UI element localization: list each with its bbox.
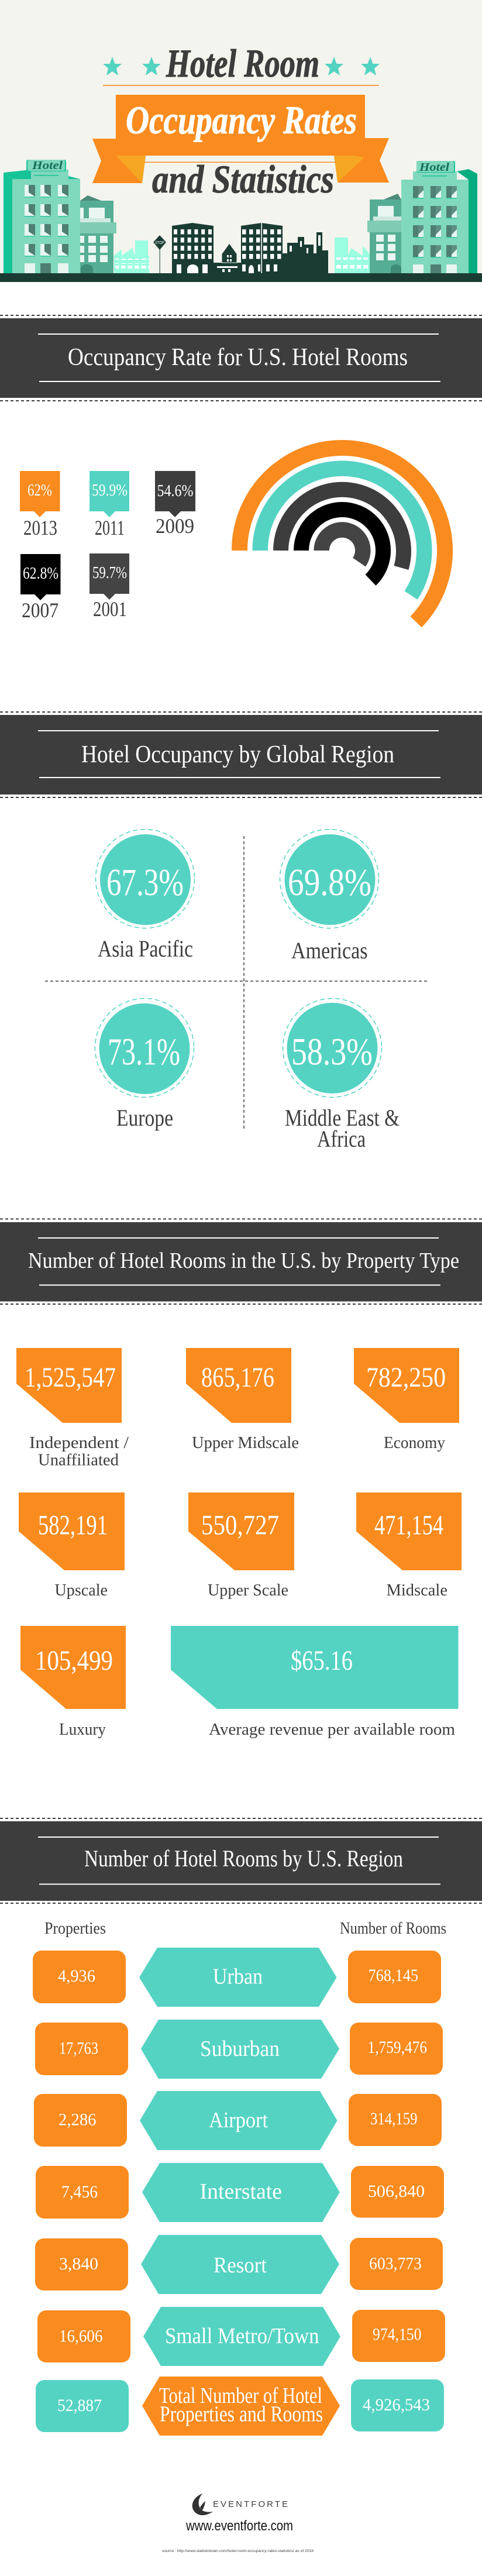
tag: 2011: 59.9%: [92, 482, 128, 500]
illustration: right factory: [335, 238, 370, 273]
tag: 2013: 2013: [23, 516, 57, 539]
row: Total: 52,887: [57, 2396, 102, 2415]
illustration: right hotel: Hotel: [419, 161, 449, 174]
illustration: left hotel: Hotel: [32, 159, 63, 172]
row: Interstate: 7,456: [61, 2182, 98, 2202]
arc: 2001 gray: [322, 530, 363, 562]
illustration: left factory: [114, 240, 149, 273]
row: Airport: 2,286: [58, 2110, 96, 2130]
section header: Number of Hotel Rooms in the U.S. by Property Type: [0, 1219, 482, 1304]
section header: Hotel Occupancy by Global Region: [0, 712, 482, 797]
thin line behind ribbon: [144, 161, 335, 163]
illustration: left hotel: [4, 159, 116, 273]
stat: Asia Pacific: Asia Pacific: [98, 936, 193, 962]
arc: 2011 teal: [260, 469, 424, 596]
row: Airport: Airport: [209, 2108, 268, 2133]
panel: rooms by region table: [33, 1920, 446, 2436]
card: Upscale: [19, 1492, 125, 1600]
tag: 2009: [155, 471, 195, 538]
row: Small Metro/Town: 974,150: [373, 2325, 421, 2344]
tag: 2011: [89, 471, 129, 539]
row: Small Metro/Town: Small Metro/Town: [165, 2324, 319, 2348]
footer: Eventforte logo and source: [162, 2494, 314, 2553]
panel: property type cards: [16, 1348, 462, 1739]
row: Interstate: 506,840: [368, 2182, 425, 2201]
arc: 2009 dark: [281, 490, 404, 568]
stat: Asia Pacific: [96, 830, 194, 962]
row: Total: 4,926,543: [363, 2395, 430, 2415]
icon: stop sign: [153, 235, 166, 273]
card: Upscale: 582,191: [38, 1509, 108, 1541]
tag: 2013: [20, 471, 60, 539]
header: title and cityscape: [0, 41, 482, 282]
card: Average revenue per available room: Average revenue per available room: [209, 1720, 455, 1739]
stat: Middle East and Africa: 58.3%: [291, 1031, 373, 1073]
tag: 2007: 62.8%: [23, 565, 58, 583]
stat: Americas: Americas: [291, 937, 367, 964]
section header: Occupancy Rate for U.S. Hotel Rooms: [0, 315, 482, 401]
card: Upscale: Upscale: [55, 1581, 108, 1600]
tag: 2001: 59.7%: [92, 564, 127, 582]
row: Total: Total Number of Hotel: [159, 2384, 322, 2408]
column heading: Properties: Properties: [44, 1920, 106, 1938]
section header: Number of Hotel Rooms by U.S. Region: Number of Hotel Rooms by U.S. Region: [84, 1845, 403, 1872]
row: Small Metro/Town: 16,606: [59, 2326, 103, 2346]
stat: Americas: 69.8%: [288, 861, 371, 904]
stat: Middle East and Africa: Middle East &: [285, 1105, 400, 1131]
source note: source : http://www.statisticbrain.com/hotel-room-occupancy-rates-statistics/ as of 2016: [162, 2549, 314, 2553]
row: Resort: Resort: [214, 2253, 267, 2278]
card: Upper Scale: 550,727: [201, 1509, 279, 1541]
section header: Occupancy Rate for U.S. Hotel Rooms: Occupancy Rate for U.S. Hotel Rooms: [68, 344, 408, 371]
chart: concentric arc occupancy chart: [240, 448, 445, 622]
card: Independent / Unaffiliated: Independent /: [29, 1433, 129, 1452]
tag: 2011: 2011: [95, 516, 125, 539]
card: Upper Scale: Upper Scale: [208, 1581, 288, 1600]
row: Total: [36, 2376, 444, 2436]
tag: 2001: [89, 553, 129, 621]
row: Total: Properties and Rooms: [160, 2402, 323, 2427]
row: Airport: 314,159: [370, 2109, 418, 2128]
icon: stop sign: STOP: [155, 241, 164, 245]
row: Resort: 603,773: [369, 2254, 422, 2274]
card: Midscale: Midscale: [386, 1581, 447, 1600]
section header: Hotel Occupancy by Global Region: Hotel Occupancy by Global Region: [81, 741, 394, 768]
title: Occupancy Rates: Occupancy Rates: [126, 98, 357, 142]
card: Upper Midscale: Upper Midscale: [192, 1433, 299, 1452]
divider lines: [45, 836, 428, 1130]
tag: 2007: 2007: [22, 599, 58, 622]
tag: 2009: 2009: [156, 514, 194, 538]
title: and Statistics: and Statistics: [152, 157, 334, 201]
arc: 2007 black: [301, 510, 383, 580]
card: Economy: [354, 1348, 459, 1452]
card: Average revenue per available room: [171, 1626, 459, 1739]
card: Independent / Unaffiliated: 1,525,547: [25, 1362, 116, 1393]
card: Economy: Economy: [384, 1433, 445, 1452]
ground strip: [0, 273, 482, 282]
row: Small Metro/Town: [37, 2307, 445, 2366]
card: Luxury: [20, 1626, 126, 1739]
row: Airport: [34, 2091, 442, 2150]
card: Midscale: 471,154: [374, 1509, 443, 1541]
row: Resort: 3,840: [59, 2254, 98, 2274]
row: Interstate: Interstate: [200, 2179, 282, 2204]
row: Urban: 4,936: [58, 1966, 95, 1986]
illustration: dark city skyline: [172, 223, 328, 273]
panel: occupancy legend tags: [20, 471, 195, 622]
row: Urban: Urban: [213, 1965, 263, 1989]
section header: Number of Hotel Rooms by U.S. Region: [0, 1818, 482, 1903]
card: Luxury: 105,499: [35, 1645, 113, 1676]
stat: Europe: [95, 998, 194, 1131]
row: Suburban: 1,759,476: [367, 2038, 427, 2057]
card: Midscale: [356, 1492, 462, 1600]
illustration: right hotel: [367, 161, 477, 273]
stat: Middle East and Africa: Africa: [317, 1126, 366, 1152]
row: Urban: 768,145: [369, 1966, 418, 1985]
title rule: [103, 85, 379, 86]
tag: 2013: 62%: [27, 482, 52, 500]
stat: Americas: [280, 830, 379, 964]
card: Independent / Unaffiliated: [16, 1348, 129, 1470]
row: Resort: [35, 2235, 443, 2294]
row: Interstate: [36, 2163, 444, 2222]
card: Luxury: Luxury: [59, 1720, 106, 1739]
title: Hotel Room: Hotel Room: [166, 41, 319, 85]
card: Independent / Unaffiliated: Unaffiliated: [38, 1451, 119, 1470]
stat: Europe: 73.1%: [108, 1031, 180, 1073]
row: Suburban: [35, 2020, 443, 2079]
stat: Europe: Europe: [116, 1105, 173, 1131]
row: Urban: [33, 1948, 441, 2007]
header background: [0, 0, 482, 282]
tag: 2001: 2001: [93, 597, 127, 621]
card: Upper Midscale: 865,176: [201, 1362, 274, 1393]
ribbon banner: [92, 95, 389, 183]
card: Upper Midscale: [186, 1348, 299, 1452]
tag: 2007: [20, 554, 61, 622]
stat: Asia Pacific: 67.3%: [106, 861, 184, 904]
tag: 2009: 54.6%: [157, 482, 193, 500]
icon: teal stars: [103, 57, 380, 75]
stat: Middle East and Africa: [283, 998, 400, 1152]
row: Suburban: Suburban: [200, 2037, 280, 2061]
row: Suburban: 17,763: [59, 2038, 98, 2058]
card: Economy: 782,250: [366, 1362, 446, 1393]
arc: 2013 orange: [240, 448, 445, 622]
card: Upper Scale: [188, 1492, 294, 1600]
website: www.eventforte.com: [185, 2518, 293, 2534]
column heading: Number of Rooms: Number of Rooms: [340, 1920, 446, 1938]
panel: global regions: [45, 830, 428, 1152]
icon: Eventforte crescent mark: [192, 2494, 213, 2515]
logo wordmark: EVENTFORTE: [213, 2499, 288, 2509]
card: Average revenue per available room: $65.16: [291, 1645, 353, 1676]
